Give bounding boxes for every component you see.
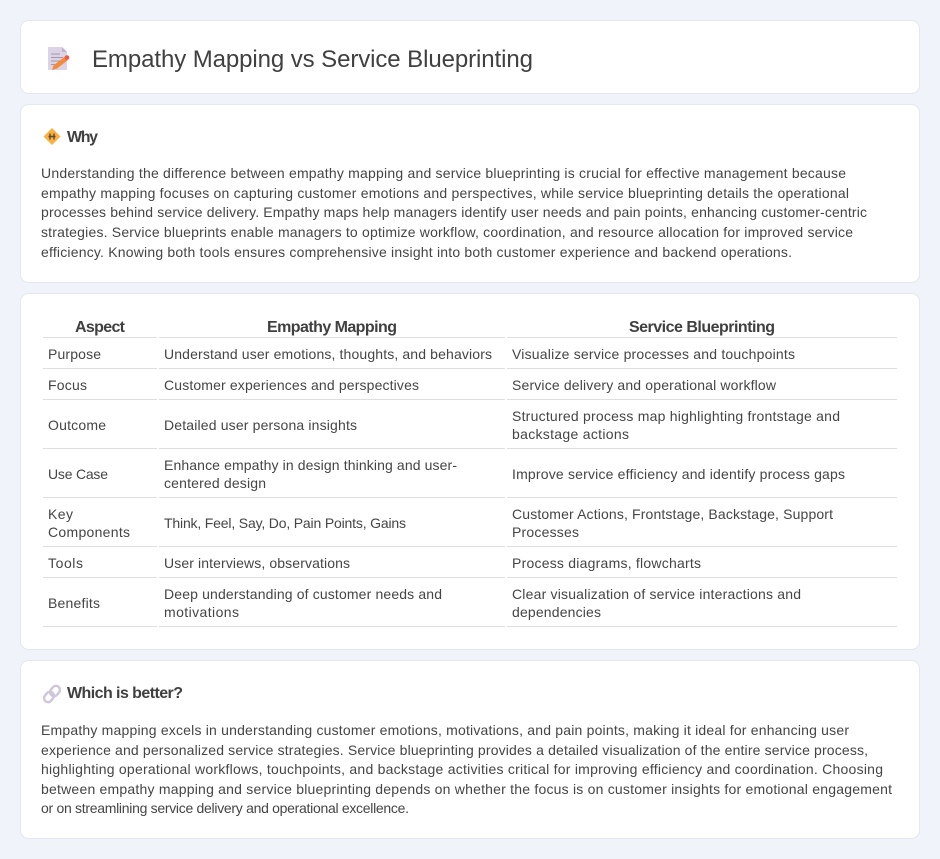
row: tools: User interviews, observations [164, 555, 350, 571]
row: key components: Think, Feel, Say, Do, Pain Points, Gains [164, 515, 406, 531]
row: use case [48, 457, 845, 491]
row: key components [48, 506, 833, 540]
row: benefits: motivations [164, 604, 239, 620]
row: tools: Process diagrams, flowcharts [512, 555, 701, 571]
why paragraph: empathy mapping focuses on capturing customer emotions and perspectives, while service blueprinting details the operational [41, 185, 849, 201]
row: purpose: Purpose [48, 346, 101, 362]
panel: which is better [20, 660, 920, 838]
row: benefits: Clear visualization of service interactions and [512, 586, 801, 602]
row: use case: Use Case [48, 466, 108, 482]
row: purpose: Understand user emotions, thoughts, and behaviors [164, 346, 492, 362]
row: focus: Service delivery and operational workflow [512, 377, 777, 393]
table header: Aspect [75, 319, 126, 336]
row: benefits: Deep understanding of customer needs and [164, 586, 442, 602]
row: key components: Components [48, 524, 130, 540]
row: outcome [48, 408, 840, 442]
why paragraph: Understanding the difference between empathy mapping and service blueprinting is crucial for effective management because [41, 165, 846, 181]
why paragraph [41, 165, 867, 260]
row: focus: Focus [48, 377, 87, 393]
panel: comparison table [20, 294, 920, 650]
row: focus [48, 377, 777, 393]
why paragraph: processes behind service delivery. Empathy maps help managers identify user needs and pain points, enhancing customer-centric [41, 204, 867, 220]
row: tools: Tools [48, 555, 83, 571]
row: use case: centered design [164, 475, 266, 491]
row: outcome: Detailed user persona insights [164, 417, 357, 433]
table header [75, 319, 775, 336]
table header: Empathy Mapping [267, 319, 397, 336]
row: outcome: Outcome [48, 417, 106, 433]
panel: title [20, 20, 920, 94]
row: tools [48, 555, 701, 571]
which is better paragraph: between empathy mapping and service blueprinting depends on whether the focus is on customer insights for emotional engagement [41, 781, 892, 797]
heading: why: Why [67, 129, 98, 146]
which is better paragraph: experience and personalized service strategies. Service blueprinting provides a detailed visualization of the entire service process, [41, 742, 868, 758]
row: focus: Customer experiences and perspectives [164, 377, 419, 393]
row: key components: Key [48, 506, 73, 522]
which is better paragraph: highlighting operational workflows, touchpoints, and backstage activities critical for improving efficiency and coordination. Choosing [41, 761, 883, 777]
row: purpose [48, 346, 795, 362]
why paragraph: efficiency. Knowing both tools ensures comprehensive insight into both customer experience and backend operations. [41, 244, 792, 260]
row: use case: Enhance empathy in design thinking and user- [164, 457, 457, 473]
which is better paragraph [41, 722, 892, 816]
heading: which is better: Which is better? [67, 685, 183, 702]
why paragraph: strategies. Service blueprints enable managers to optimize workflow, coordination, and resource allocation for improved service [41, 224, 853, 240]
icon: memo with pencil [48, 47, 69, 70]
row: key components: Customer Actions, Frontstage, Backstage, Support [512, 506, 833, 522]
row: outcome: backstage actions [512, 426, 629, 442]
row: benefits [48, 586, 801, 620]
row: key components: Processes [512, 524, 579, 540]
icon: warning diamond [44, 128, 60, 145]
which is better paragraph: or on streamlining service delivery and operational excellence. [41, 800, 409, 816]
icon: link [42, 684, 62, 704]
title: Empathy Mapping vs Service Blueprinting [92, 46, 533, 73]
which is better paragraph: Empathy mapping excels in understanding customer emotions, motivations, and pain points, making it ideal for enhancing user [41, 722, 849, 738]
row: benefits: Benefits [48, 595, 100, 611]
row: use case: Improve service efficiency and identify process gaps [512, 466, 845, 482]
row: benefits: dependencies [512, 604, 601, 620]
table header: Service Blueprinting [629, 319, 775, 336]
row: outcome: Structured process map highlighting frontstage and [512, 408, 840, 424]
row: purpose: Visualize service processes and touchpoints [512, 346, 795, 362]
panel: why [20, 104, 920, 282]
